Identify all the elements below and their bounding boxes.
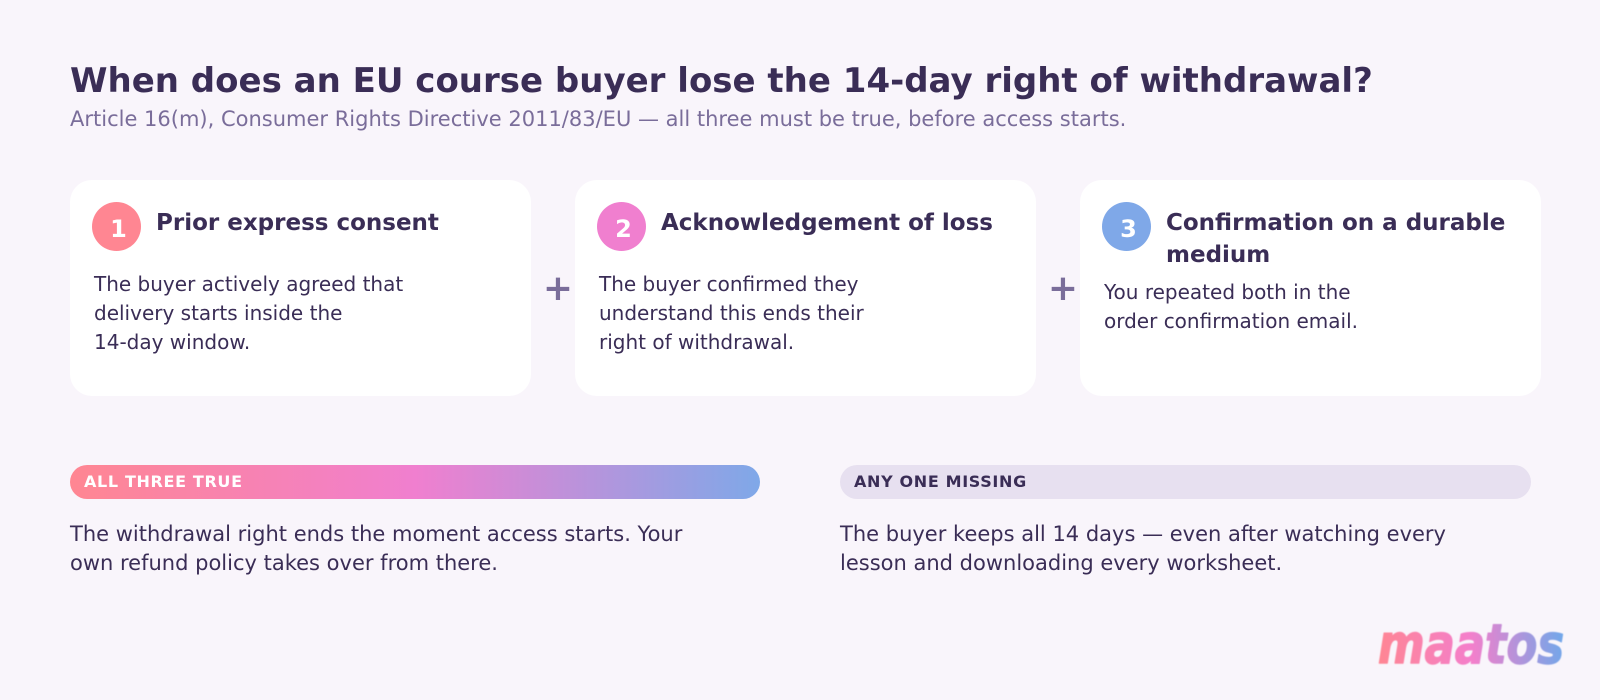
text: condition 2 description: right of withdrawal. — [599, 330, 794, 354]
text: condition 2 description — [598, 272, 864, 354]
text: condition 2 description: The buyer confirmed they — [599, 272, 859, 296]
text: condition 1 description: delivery starts inside the — [94, 301, 342, 325]
heading: confirmation on a durable medium: medium — [1166, 242, 1270, 268]
icon: number 1: 1 — [110, 215, 127, 243]
heading: prior express consent: Prior express consent — [156, 210, 439, 236]
pill: all three true — [70, 465, 760, 499]
icon: number 2: 2 — [615, 215, 632, 243]
text: condition 3 description — [1104, 280, 1358, 333]
text: condition 2 description: understand this ends their — [599, 301, 864, 325]
text: all three true outcome: own refund policy takes over from there. — [70, 551, 498, 575]
text: condition 1 description: 14-day window. — [94, 330, 250, 354]
icon: plus between 1 and 2: + — [543, 268, 573, 309]
pill: any one missing: ANY ONE MISSING — [854, 472, 1027, 491]
icon: number 3: 3 — [1120, 215, 1137, 243]
icon: number 1 — [92, 202, 141, 251]
panel: condition 2 — [575, 180, 1036, 396]
title: When does an EU course buyer lose the 14-day right of withdrawal? — [70, 61, 1373, 101]
panel: condition 1 — [70, 180, 531, 396]
icon: number 3 — [1102, 202, 1151, 251]
text: condition 1 description: The buyer actively agreed that — [94, 272, 403, 296]
text: any one missing outcome: The buyer keeps all 14 days — even after watching every — [840, 522, 1446, 546]
text: any one missing outcome — [840, 522, 1446, 575]
icon: plus between 2 and 3: + — [1048, 268, 1078, 309]
text: condition 3 description: order confirmation email. — [1104, 309, 1358, 333]
pill: any one missing — [840, 465, 1531, 499]
text: any one missing outcome: lesson and downloading every worksheet. — [840, 551, 1282, 575]
heading: acknowledgement of loss: Acknowledgement of loss — [661, 210, 993, 236]
pill: all three true: ALL THREE TRUE — [84, 472, 243, 491]
panel: condition 3 — [1080, 180, 1541, 396]
subtitle: Article 16(m), Consumer Rights Directive 2011/83/EU — all three must be true, before access starts. — [70, 107, 1126, 131]
text: all three true outcome: The withdrawal right ends the moment access starts. Your — [70, 522, 682, 546]
heading: confirmation on a durable medium — [1166, 210, 1505, 268]
icon: number 2 — [597, 202, 646, 251]
text: all three true outcome — [70, 522, 682, 575]
text: condition 1 description — [94, 272, 403, 354]
heading: confirmation on a durable medium: Confirmation on a durable — [1166, 210, 1505, 236]
text: condition 3 description: You repeated both in the — [1104, 280, 1351, 304]
